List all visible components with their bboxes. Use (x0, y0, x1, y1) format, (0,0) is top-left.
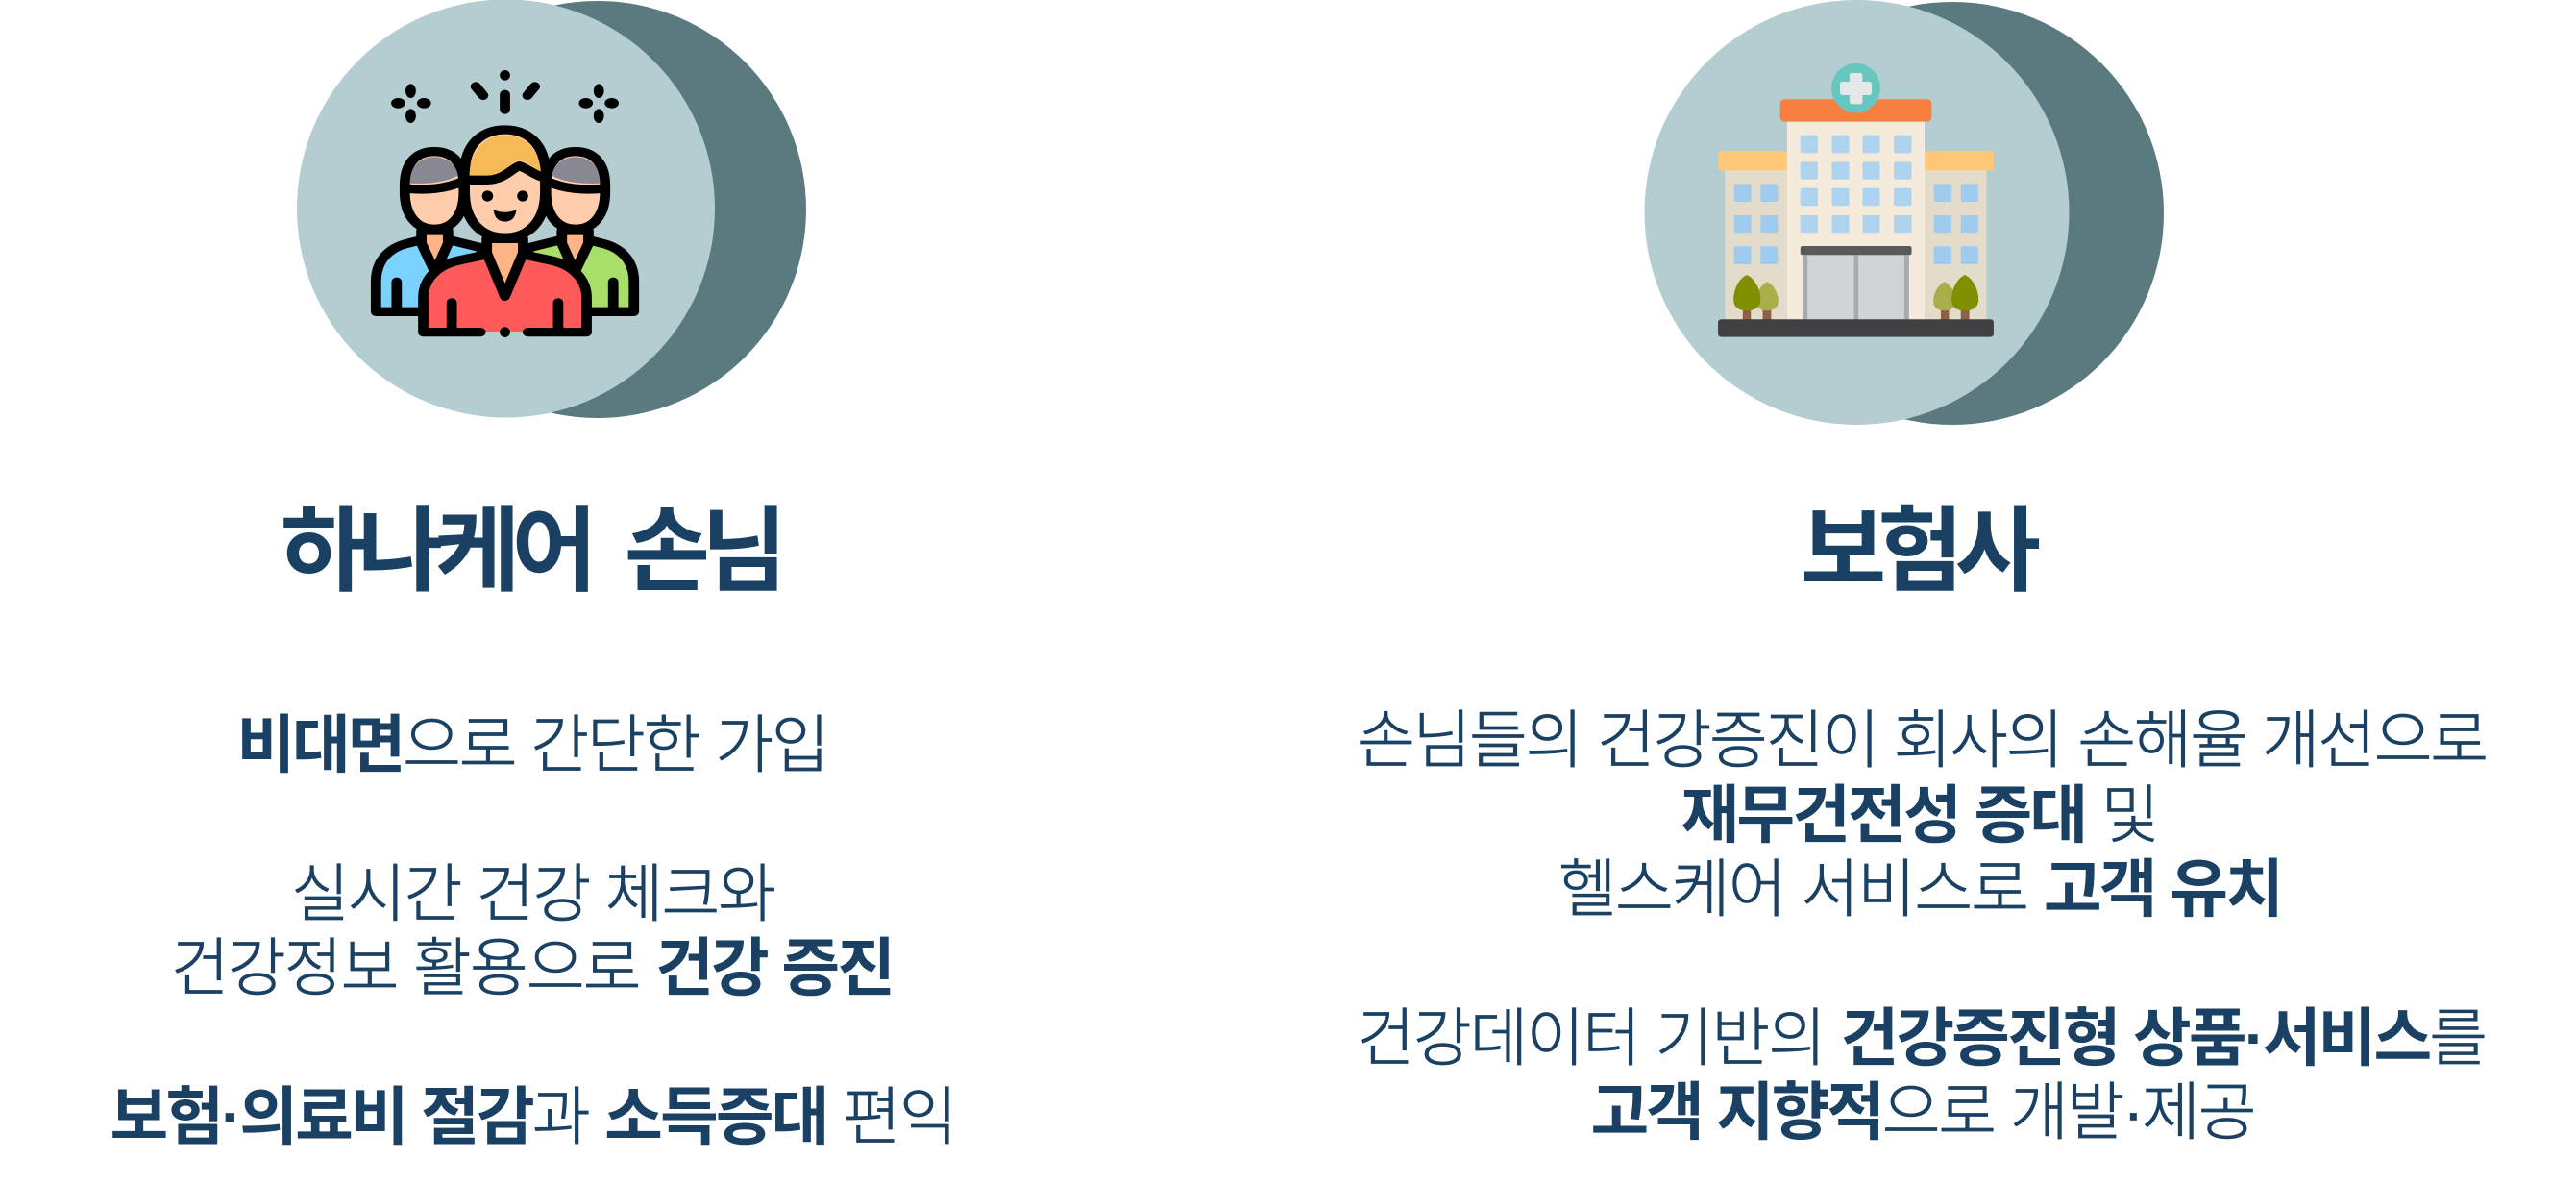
text block: insurer benefits: 건강데이터 기반의 건강증진형 상품·서비스를 (1357, 1002, 2488, 1073)
heading: 하나케어 손님: 하나케어 손님 (281, 499, 778, 604)
text block: customer benefits: 보험·의료비 절감과 소득증대 편익 (110, 1081, 957, 1152)
text block: customer benefits (110, 709, 957, 1152)
panel: 하나케어 손님 (110, 0, 957, 1152)
text block: insurer benefits: 재무건전성 증대 및 (1681, 779, 2160, 851)
icon badge: insurer (1645, 0, 2164, 425)
text block: insurer benefits: 고객 지향적으로 개발·제공 (1591, 1076, 2256, 1147)
heading: 보험사: 보험사 (1801, 499, 2041, 604)
panel: 보험사 (1357, 0, 2489, 1147)
icon: hospital building (1718, 63, 1994, 337)
text block: insurer benefits: 손님들의 건강증진이 회사의 손해율 개선으로 (1357, 704, 2489, 776)
text block: insurer benefits (1357, 704, 2489, 1147)
icon: three people (376, 70, 634, 337)
text block: customer benefits: 실시간 건강 체크와 (291, 858, 776, 929)
text block: customer benefits: 비대면으로 간단한 가입 (236, 709, 830, 780)
text block: customer benefits: 건강정보 활용으로 건강 증진 (171, 932, 895, 1003)
text block: insurer benefits: 헬스케어 서비스로 고객 유치 (1558, 853, 2283, 925)
icon badge: customers (297, 0, 806, 418)
